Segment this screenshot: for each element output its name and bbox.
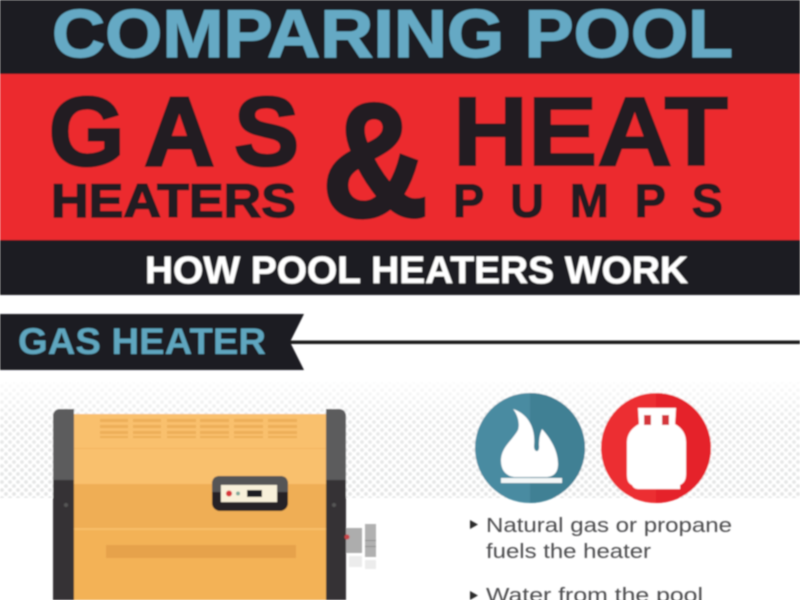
section banner: gas heater <box>0 314 800 370</box>
title: gas: GAS <box>49 77 299 186</box>
control panel <box>212 476 288 511</box>
banner text: GAS HEATER <box>18 321 266 362</box>
red title panel <box>0 70 800 251</box>
left side rail <box>53 409 74 600</box>
illustration: gas heater unit <box>53 409 376 600</box>
icon: propane tank on red circle <box>601 393 711 503</box>
side connector <box>344 524 376 569</box>
title: heaters: HEATERS <box>51 174 296 227</box>
title: pumps: PUMPS <box>453 174 723 227</box>
header band: comparing pool <box>0 0 800 74</box>
subtitle band <box>0 240 800 295</box>
right side rail <box>326 409 346 600</box>
heater body <box>74 414 326 600</box>
icon: flame on teal circle <box>475 393 585 503</box>
halftone background <box>0 382 800 498</box>
title: heat: HEAT <box>453 77 728 186</box>
subtitle: how pool heaters work: HOW POOL HEATERS WORK <box>145 250 689 292</box>
text block: how gas heaters work <box>470 515 732 600</box>
bullet: natural gas: Natural gas or propane <box>486 515 732 537</box>
bullet: natural gas: fuels the heater <box>486 541 651 563</box>
bullet: natural gas <box>470 515 732 563</box>
title: ampersand: & <box>322 70 428 251</box>
heater vents <box>100 419 297 438</box>
